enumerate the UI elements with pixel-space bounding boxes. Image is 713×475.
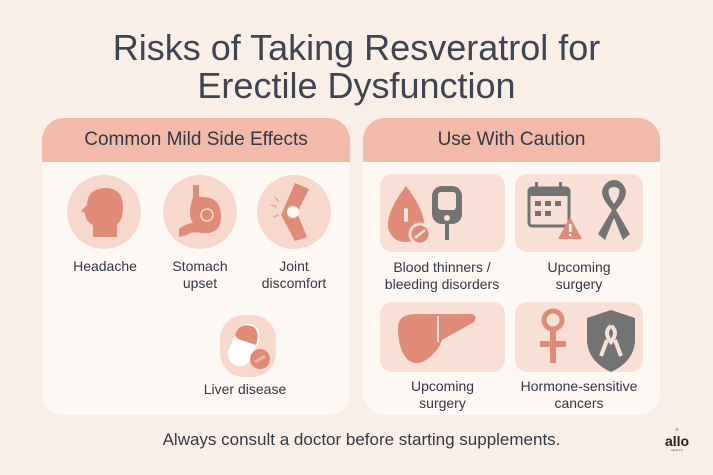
title: Erectile Dysfunction bbox=[197, 65, 516, 106]
label: stomach upset: Stomach bbox=[172, 258, 228, 274]
label: blood thinners: Blood thinners / bbox=[393, 259, 491, 275]
label: blood thinners bbox=[385, 259, 499, 292]
panel: common mild side effects bbox=[42, 118, 350, 415]
label: upcoming surgery 2: surgery bbox=[419, 395, 466, 411]
title bbox=[113, 27, 600, 106]
footer note: Always consult a doctor before starting supplements. bbox=[163, 430, 560, 449]
label: joint discomfort: discomfort bbox=[262, 275, 326, 291]
label: upcoming surgery 2: Upcoming bbox=[411, 378, 474, 394]
heading: Use With Caution bbox=[438, 129, 585, 150]
logo: allo bbox=[665, 433, 689, 449]
label: stomach upset bbox=[172, 258, 228, 291]
icon: head bbox=[67, 175, 141, 249]
label: stomach upset: upset bbox=[183, 275, 217, 291]
label: upcoming surgery: Upcoming bbox=[547, 259, 611, 275]
label: upcoming surgery 2 bbox=[411, 378, 474, 411]
label: liver disease: Liver disease bbox=[204, 381, 286, 397]
logo bbox=[665, 427, 689, 452]
label: blood thinners: bleeding disorders bbox=[385, 276, 499, 292]
label: hormone-sensitive cancers bbox=[521, 378, 637, 411]
tile: upcoming surgery calendar bbox=[515, 174, 643, 252]
icon: joint bbox=[257, 175, 331, 249]
heading bbox=[363, 118, 660, 162]
title: Risks of Taking Resveratrol for bbox=[113, 27, 600, 68]
label: upcoming surgery bbox=[547, 259, 611, 292]
label: hormone-sensitive cancers: Hormone-sensitive bbox=[521, 378, 637, 394]
heading bbox=[42, 118, 350, 162]
icon: pill bbox=[220, 315, 276, 377]
logo: HEALTH bbox=[671, 448, 683, 452]
heading: Common Mild Side Effects bbox=[84, 129, 308, 150]
tile: blood thinners bbox=[380, 174, 505, 252]
label: headache: Headache bbox=[73, 258, 137, 274]
icon: stomach bbox=[163, 175, 237, 249]
label: upcoming surgery: surgery bbox=[556, 276, 602, 292]
panel: use with caution bbox=[363, 118, 660, 415]
label: joint discomfort bbox=[262, 258, 326, 291]
tile: hormone bbox=[515, 302, 643, 372]
logo: ✦ bbox=[674, 427, 680, 434]
tile: liver bbox=[380, 302, 505, 372]
label: joint discomfort: Joint bbox=[279, 258, 309, 274]
label: hormone-sensitive cancers: cancers bbox=[554, 395, 604, 411]
